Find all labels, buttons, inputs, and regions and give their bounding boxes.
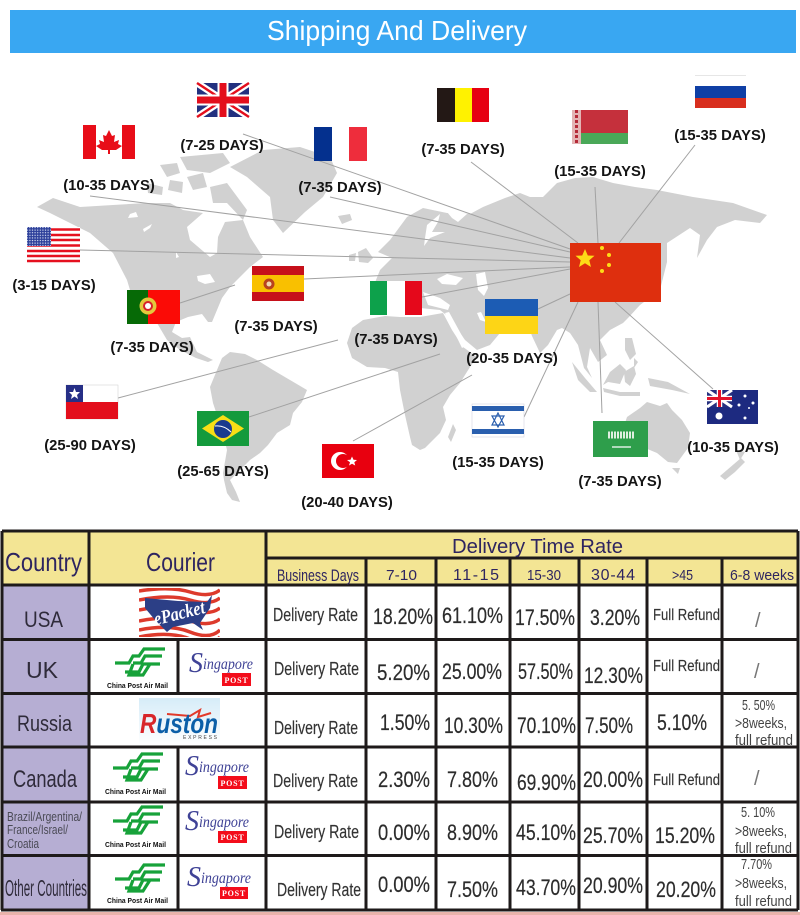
row: Brazil group: full refund [735,840,792,857]
logo: Singapore Post Brazil group: POST [220,833,245,842]
row: Russia: 5.10% [657,710,707,735]
row: Russia: 10.30% [444,713,503,738]
row: UK: 57.50% [518,659,573,684]
row: USA: 61.10% [442,603,503,628]
logo: Singapore Post Other Countries [187,862,251,899]
flag: Russia [695,75,746,108]
title banner: Shipping And Delivery [267,15,527,46]
header: delivery time rate: Delivery Time Rate [452,536,623,558]
flag: Spain [252,266,304,301]
logo: Singapore Post UK: S [189,648,203,679]
row: USA: / [755,610,761,632]
row: Other Countries: Delivery Rate [277,880,361,900]
row: UK: / [754,661,760,683]
row: Other Countries: 7.50% [447,877,498,902]
title banner [10,10,796,53]
header: business days and day ranges: 11-15 [453,567,499,584]
row: USA: 17.50% [515,605,575,630]
header: courier: Courier [146,547,215,577]
label: Belgium: (7-35 DAYS) [421,142,505,158]
row: Russia: 7.50% [585,713,633,738]
header: business days and day ranges: 6-8 weeks [730,567,794,584]
row: Brazil group [274,804,792,857]
country names: UK [26,657,59,683]
flag: Chile [66,385,118,419]
label: Australia: (10-35 DAYS) [687,440,779,456]
label: Israel: (15-35 DAYS) [452,455,544,471]
logo: Singapore Post Canada: POST [220,779,245,788]
label: Brazil: (25-65 DAYS) [177,464,269,480]
flag: USA [27,227,80,262]
country names [5,607,87,901]
logo: China Post Other Countries [107,865,168,905]
row: USA: Full Refund [653,607,720,624]
row: Canada: 7.80% [447,767,498,792]
country names: Brazil/Argentina/ [7,810,82,824]
logo: China Post Brazil group: China Post Air Mail [105,842,166,849]
row: Canada [273,767,760,795]
label: France: (7-35 DAYS) [298,180,382,196]
logo: Singapore Post Other Countries: ingapore [201,870,251,887]
flag: Ukraine [485,299,538,334]
row: Brazil group: 5. 10% [741,804,775,821]
row: Russia: 5. 50% [742,697,775,714]
row: Other Countries: 20.20% [656,877,716,902]
logo: Singapore Post Canada: S [185,751,199,782]
logo: Singapore Post Brazil group: S [185,806,199,837]
country column background [1,585,89,910]
logo: Singapore Post Other Countries: POST [222,889,246,898]
row: Canada: / [754,768,760,790]
logo: Singapore Post UK: ingapore [203,656,253,673]
connector lines [80,134,713,441]
label: UK: (7-25 DAYS) [180,138,264,154]
logo: Singapore Post Canada [185,751,249,789]
logo: ePacket: ePacket [152,597,208,630]
logo: Ruston Express: Ruston [140,708,218,739]
country names: Croatia [7,837,39,851]
row: Russia [274,697,793,749]
flag: Belarus [572,110,628,144]
flag: Italy [370,281,422,315]
row: USA: 3.20% [590,605,640,630]
row: Other Countries: >8weeks, [735,875,787,892]
row: Russia: >8weeks, [735,715,787,732]
logo: Singapore Post UK [189,648,253,686]
table grid [1,531,798,910]
flag: Portugal [127,290,180,324]
logo: Singapore Post Canada: ingapore [199,759,249,776]
row: Other Countries: 7.70% [741,856,772,873]
logo: Singapore Post Other Countries: S [187,862,201,893]
logo: Singapore Post Brazil group [185,806,249,843]
header: business days and day ranges: Business Days [277,566,359,585]
header: business days and day ranges: >45 [672,567,693,584]
world map [37,147,767,502]
flag: Canada [83,125,135,159]
country names: Canada [13,766,77,793]
country names: USA [24,607,63,632]
row: USA [273,603,761,632]
logo: China Post Brazil group [105,807,166,849]
label: Belarus: (15-35 DAYS) [554,164,646,180]
row: Brazil group: 8.90% [447,820,498,845]
row: Other Countries: 43.70% [516,875,576,900]
label: Ukraine: (20-35 DAYS) [466,351,558,367]
map inland seas [128,212,488,348]
row: Russia: 1.50% [380,710,430,735]
row: Canada: 69.90% [517,770,576,795]
row: Brazil group: 25.70% [583,823,643,848]
country names: Other Countries [5,875,87,901]
row: UK: 25.00% [442,659,502,684]
label: Italy: (7-35 DAYS) [354,332,438,348]
row: Brazil group: 0.00% [378,820,430,845]
label: Spain: (7-35 DAYS) [234,319,318,335]
logo: ePacket [139,588,220,637]
row: Russia: 70.10% [517,713,576,738]
row: UK: Full Refund [653,658,720,675]
row: Canada: Delivery Rate [273,771,358,791]
logo: Singapore Post UK: POST [224,676,249,685]
row: Other Countries: 20.90% [583,873,643,898]
row: USA: 18.20% [373,604,433,629]
flag: Turkey [322,444,374,478]
flag: China [570,243,661,302]
header: country: Country [5,547,82,577]
label: Portugal: (7-35 DAYS) [110,340,194,356]
row: UK [274,658,760,688]
delivery table [1,531,798,910]
flag: Brazil [197,411,249,446]
row: UK: 12.30% [584,663,643,688]
row: Brazil group: 45.10% [516,820,576,845]
label: Russia: (15-35 DAYS) [674,128,766,144]
label: Turkey: (20-40 DAYS) [301,495,393,511]
row: Canada: Full Refund [653,772,720,789]
row: Brazil group: >8weeks, [735,823,787,840]
flag: France [314,127,367,161]
row: Other Countries: full refund [735,893,792,910]
logo: China Post Canada [105,754,166,796]
label: USA: (3-15 DAYS) [12,278,96,294]
flag: UK [197,83,249,117]
row: Brazil group: Delivery Rate [274,822,359,842]
country names: France/Israel/ [7,823,68,837]
row: Canada: 20.00% [583,767,643,792]
label: Canada: (10-35 DAYS) [63,178,155,194]
country names: Russia [17,711,73,736]
header: business days and day ranges: 7-10 [386,567,417,584]
row: UK: Delivery Rate [274,659,359,679]
header: business days and day ranges: 15-30 [527,567,561,584]
logo: China Post UK: China Post Air Mail [107,683,168,690]
flag: Saudi Arabia [593,421,648,457]
logo: China Post Other Countries: China Post Air Mail [107,898,168,905]
logo: Ruston Express: EXPRESS [183,735,218,741]
logo: China Post UK [107,649,168,690]
logo: Singapore Post Brazil group: ingapore [199,814,249,831]
label: Chile: (25-90 DAYS) [44,438,136,454]
row: Russia: Delivery Rate [274,718,358,738]
row: Other Countries [277,856,792,910]
row: UK: 5.20% [377,660,430,685]
bottom band [0,912,800,915]
header: business days and day ranges [277,566,794,585]
flag: Israel [472,404,524,437]
logo: China Post Canada: China Post Air Mail [105,789,166,796]
flag: Australia [707,390,758,424]
row: Brazil group: 15.20% [655,823,715,848]
row: USA: Delivery Rate [273,605,358,625]
logo: Ruston Express [139,698,220,745]
header: business days and day ranges: 30-44 [591,567,635,584]
row: Canada: 2.30% [378,767,430,792]
row: Other Countries: 0.00% [378,872,430,897]
row: Russia: full refund [735,732,793,749]
table header backgrounds [1,531,798,585]
flag: Belgium [437,88,489,122]
label: Saudi Arabia: (7-35 DAYS) [578,474,662,490]
